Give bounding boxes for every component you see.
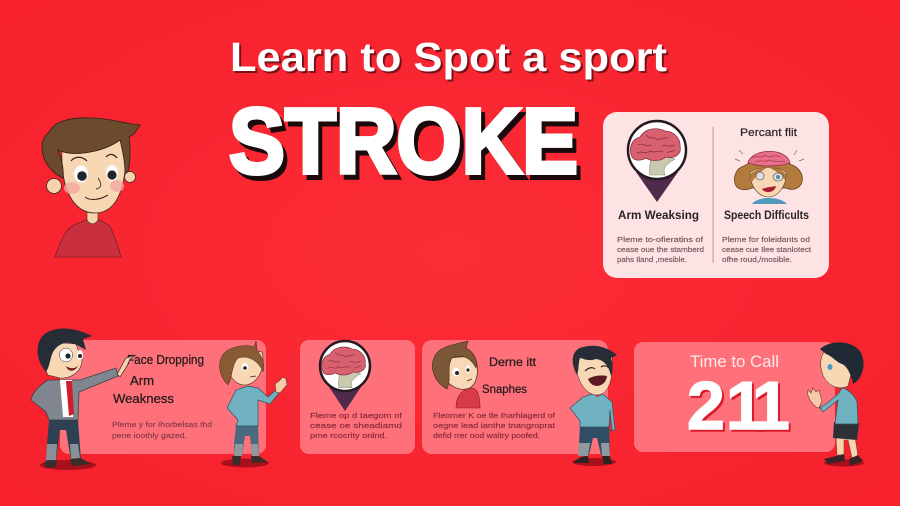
title: STROKE: STROKE: [229, 89, 578, 193]
title line: Learn to Spot a sport: [230, 34, 667, 80]
text block: defid rrer ood waitry poofed.: [433, 431, 540, 440]
heading: Derne itt: Derne itt: [489, 355, 537, 369]
text block: oegne lead ianthe tnangroprat: [433, 421, 556, 430]
text block: Pleme y for Ihorbelsas thd: [112, 420, 212, 429]
text block: left column: cease oue the stamberd: [617, 245, 704, 254]
heading: Face Dropping: Face Dropping: [127, 352, 204, 367]
panel: symptoms: [422, 340, 608, 454]
text block: right column: [722, 235, 812, 264]
heading: Snaphes: Snaphes: [482, 382, 527, 396]
text block: pme rcocrity onlnd.: [310, 431, 387, 440]
number: 211: 211: [687, 368, 790, 444]
character: smiling boy top left: [42, 118, 140, 257]
text block: [433, 411, 556, 440]
text block: left column: pahs Iland ,mesible.: [617, 255, 687, 264]
panel: face dropping and arm weakness: [60, 340, 266, 454]
heading: Speech Difficults: Speech Difficults: [724, 208, 809, 222]
text block: left column: Pleme to-ofieratins of: [617, 235, 704, 244]
text block: right column: ofhe roud,/mosible.: [722, 255, 792, 264]
text block: pene ioothly gazed.: [112, 431, 187, 440]
divider: [712, 127, 714, 263]
number: 211: 211: [689, 370, 792, 446]
character: smiling man in teal shirt: [570, 346, 617, 466]
text block: [112, 420, 212, 440]
text block: [310, 411, 403, 440]
heading: Arm Weaksing: Arm Weaksing: [618, 208, 699, 222]
heading: Time to Call: Time to Call: [690, 353, 779, 371]
icon: girl with visible brain: [734, 150, 804, 204]
heading: Percant flit: Percant flit: [740, 127, 797, 139]
text block: Fleorner K oe tle Iharhlagerd of: [433, 411, 556, 420]
character: man in suit pointing: [31, 329, 136, 470]
icon: brain location pin: [628, 121, 686, 202]
panel: top right card: [603, 112, 829, 278]
text block: right column: cease cue Ilee stanlotect: [722, 245, 812, 254]
panel: time to call: [634, 342, 835, 452]
title line: Learn to Spot a sport: [232, 36, 669, 82]
ear left: [46, 178, 62, 194]
icon: brain location pin: [320, 341, 370, 411]
text block: left column: [617, 235, 704, 264]
text block: Fleme op d Iaegom of: [310, 411, 403, 420]
character: boy waving in profile: [808, 342, 864, 466]
heading: Weakness: Weakness: [113, 392, 174, 406]
panel: brain info: [300, 340, 415, 454]
character: worried boy bust: [432, 341, 480, 408]
title: STROKE: STROKE: [233, 94, 582, 198]
character: listening boy: [220, 341, 287, 468]
heading: Arm: Arm: [130, 374, 154, 388]
text block: cease oe sheadiamd: [310, 421, 402, 430]
text block: right column: Pleme for foleidants od: [722, 235, 810, 244]
